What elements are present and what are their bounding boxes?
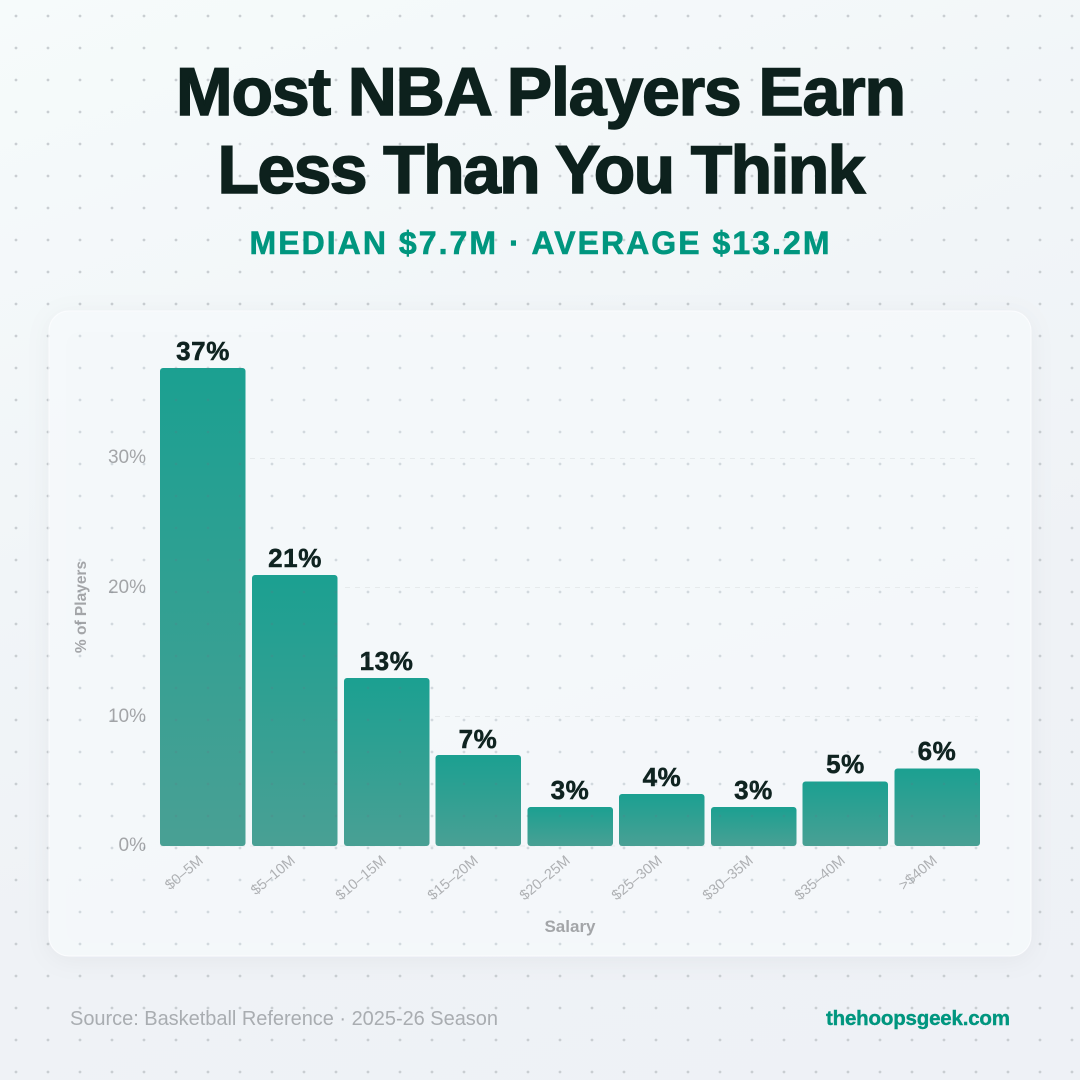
x axis labels: $20–25M (517, 853, 574, 904)
value labels: 37% (176, 336, 230, 366)
subtitle: median and average: MEDIAN $7.7M · AVERAGE $13.2M (250, 225, 830, 261)
brand url: thehoopsgeek.com (826, 1007, 1010, 1030)
source note: Source: Basketball Reference · 2025-26 Season (70, 1008, 498, 1030)
bars (160, 368, 980, 846)
title: Most NBA Players Earn (176, 54, 906, 130)
y axis labels (108, 447, 146, 856)
x axis labels: $25–30M (609, 853, 666, 904)
bar chart (73, 336, 980, 936)
y axis labels: 0% (119, 835, 146, 856)
y axis labels: 20% (108, 577, 146, 598)
panel: chart card (49, 311, 1031, 956)
value labels (176, 336, 956, 805)
x axis labels: $10–15M (333, 853, 390, 904)
x axis labels (162, 853, 941, 904)
x axis labels: $15–20M (425, 853, 482, 904)
y axis gridlines (160, 458, 978, 846)
dot pattern overlay (49, 311, 1031, 956)
x axis labels: $30–35M (700, 853, 757, 904)
x axis title: Salary (544, 917, 596, 936)
value labels: 21% (268, 543, 322, 573)
value labels: 4% (643, 762, 681, 792)
y axis labels: 30% (108, 447, 146, 468)
x axis labels: $35–40M (792, 853, 849, 904)
y axis title: % of Players (73, 561, 90, 653)
title: Less Than You Think (218, 132, 866, 208)
value labels: 7% (459, 724, 497, 754)
x axis labels: $5–10M (248, 853, 299, 899)
value labels: 13% (360, 646, 413, 676)
value labels: 5% (826, 749, 865, 779)
x axis labels: $0–5M (162, 853, 207, 894)
title (176, 54, 906, 208)
value labels: 3% (734, 775, 773, 805)
value labels: 3% (551, 775, 589, 805)
x axis labels: >$40M (896, 853, 941, 894)
y axis labels: 10% (108, 706, 146, 727)
value labels: 6% (918, 736, 956, 766)
